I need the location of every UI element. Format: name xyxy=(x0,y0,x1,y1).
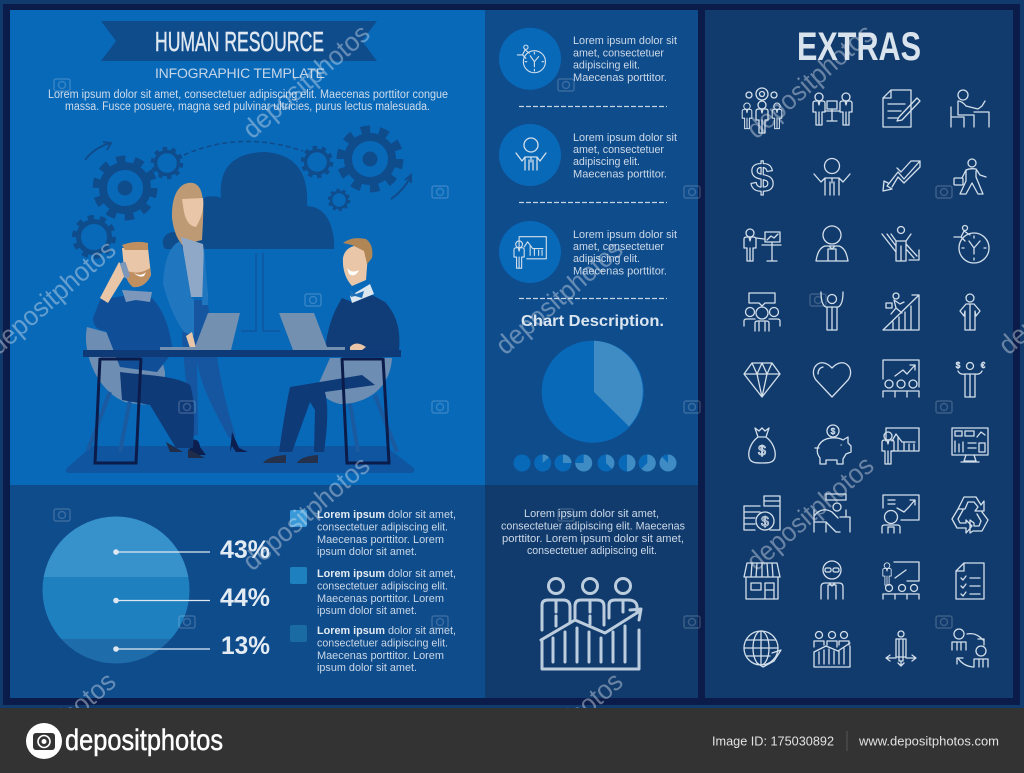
icon: person arms out xyxy=(814,158,850,195)
icon: dollar sign: $ xyxy=(750,154,774,201)
gear small 3 xyxy=(330,190,348,210)
divider 2 xyxy=(519,202,667,204)
paragraph: Lorem ipsum dolor sit amet, xyxy=(524,508,659,520)
footer logo xyxy=(26,723,223,759)
step 3 text xyxy=(573,229,677,278)
dark frame: extras xyxy=(705,4,1020,705)
legend text 2: ipsum dolor sit amet. xyxy=(317,605,417,617)
percent values: 43% xyxy=(220,536,270,564)
paragraph: consectetuer adipiscing elit. Maecenas xyxy=(501,520,685,532)
icon: piggy bank xyxy=(815,425,851,464)
illustration: floor xyxy=(66,446,414,473)
icon: recycle xyxy=(952,497,988,533)
depositphotos watermarks: depositphotos xyxy=(237,450,376,576)
icon: teacher with audience xyxy=(883,562,919,599)
icon: people swap xyxy=(952,629,988,667)
icon: globe xyxy=(744,631,781,667)
step 1 text: Maecenas porttitor. xyxy=(573,72,667,84)
icon: stressed worker xyxy=(814,494,850,532)
laptop right xyxy=(279,313,345,350)
depositphotos watermarks: depositphotos xyxy=(490,234,629,360)
legend text 3: consectetuer adipiscing elit. xyxy=(317,638,448,650)
icon: money bag: $ xyxy=(758,442,766,458)
step 3 text: amet, consectetuer xyxy=(573,241,664,253)
chart heading: Chart Description. xyxy=(521,313,664,330)
legend text 1 xyxy=(317,509,456,558)
title: HUMAN RESOURCE xyxy=(155,26,324,57)
paragraph: consectetuer adipiscing elit. xyxy=(527,545,657,557)
icon: climbing graph xyxy=(883,293,919,330)
icon: presenters with board xyxy=(813,93,852,125)
icon: monitor dashboard xyxy=(952,428,988,462)
icon: person with direction arrows xyxy=(886,631,916,666)
step 1 circle icon xyxy=(499,28,561,90)
step 3 text: Lorem ipsum dolor sit xyxy=(573,229,677,241)
gear small 2 xyxy=(303,148,331,176)
person: man with bow tie xyxy=(263,238,399,463)
icon: checklist xyxy=(956,563,984,599)
pie bands xyxy=(40,514,192,665)
paragraph: porttitor. Lorem ipsum dolor sit amet, xyxy=(502,533,684,545)
step 1 text: Lorem ipsum dolor sit xyxy=(573,35,677,47)
legend text 1: consectetuer adipiscing elit. xyxy=(317,522,448,534)
gear large right xyxy=(341,130,399,188)
step 3 circle icon xyxy=(499,221,561,283)
cloud xyxy=(163,152,334,249)
depositphotos watermarks: depositphotos xyxy=(237,18,376,144)
arrows and dashes xyxy=(85,142,111,160)
legend text 2 xyxy=(317,568,456,617)
title ribbon xyxy=(101,21,377,61)
dark frame: main xyxy=(3,4,705,705)
icon: walking with bag xyxy=(954,159,986,194)
step 2 text: amet, consectetuer xyxy=(573,144,664,156)
person: bearded man with phone xyxy=(86,242,205,458)
step 2 text: adipiscing elit. xyxy=(573,156,640,168)
legend text 2: consectetuer adipiscing elit. xyxy=(317,580,448,592)
small camera watermarks xyxy=(54,79,952,628)
mini pies row xyxy=(514,454,676,472)
legend text 3: Maecenas porttitor. Lorem xyxy=(317,650,444,662)
legend text 3: ipsum dolor sit amet. xyxy=(317,662,417,674)
percent values: 13% xyxy=(221,632,270,660)
icon: team gears xyxy=(742,88,782,133)
depositphotos watermarks: depositphotos xyxy=(741,450,880,576)
icon: bust and board xyxy=(882,495,919,533)
icon: person with falling arrows xyxy=(882,226,919,261)
subtitle: INFOGRAPHIC TEMPLATE xyxy=(155,65,325,81)
legend text 3 xyxy=(317,625,456,674)
panel: middle column xyxy=(485,10,698,485)
icon: team growth chart xyxy=(814,632,850,667)
icon: document with pen xyxy=(883,90,920,127)
gear large left xyxy=(97,160,153,216)
illustration: gears and cloud xyxy=(75,130,411,331)
large icon: team and growth chart xyxy=(541,578,641,669)
person: woman xyxy=(163,183,248,455)
intro text xyxy=(48,89,448,113)
legend text 1: ipsum dolor sit amet. xyxy=(317,546,417,558)
laptop left xyxy=(160,313,240,350)
icon: coin stacks: $ xyxy=(761,513,769,529)
icon: coin stacks xyxy=(744,496,780,530)
icon: diamond xyxy=(744,363,780,397)
percent values: 44% xyxy=(220,584,270,612)
gear lower left xyxy=(75,218,113,256)
icon: money bag xyxy=(749,428,775,463)
pie chart xyxy=(542,341,644,443)
desk xyxy=(83,350,401,463)
legend text 2: Lorem ipsum dolor sit amet, xyxy=(317,568,456,580)
divider 3 xyxy=(519,298,667,300)
step 2 text: Maecenas porttitor. xyxy=(573,168,667,180)
intro text: Lorem ipsum dolor sit amet, consectetuer adipiscing elit. Maecenas porttitor congue xyxy=(48,89,448,101)
footer logo: depositphotos xyxy=(65,724,223,757)
icon: presenter with chart xyxy=(744,229,781,261)
step 1 text: adipiscing elit. xyxy=(573,60,640,72)
icon: presenter with bar chart xyxy=(882,428,919,464)
panel: illustration background xyxy=(10,10,485,485)
icon: running clock xyxy=(954,226,989,263)
icon: falling zigzag arrow xyxy=(883,161,920,191)
icon: standing person xyxy=(960,294,980,330)
icon: person with currencies xyxy=(956,361,986,397)
icon: board with audience xyxy=(883,360,919,397)
step 2 text xyxy=(573,132,677,180)
intro text: massa. Fusce posuere, magna sed pulvinar ultricies, purus lectus malesuada. xyxy=(65,101,430,113)
legend text 3: Lorem ipsum dolor sit amet, xyxy=(317,625,456,637)
step 2 circle icon xyxy=(499,124,561,186)
step 2 text: Lorem ipsum dolor sit xyxy=(573,132,677,144)
divider 1 xyxy=(519,106,667,108)
step 3 text: Maecenas porttitor. xyxy=(573,266,667,278)
step 1 text: amet, consectetuer xyxy=(573,48,664,60)
icon: person with currencies: $ xyxy=(956,361,961,370)
image id: Image ID: 175030892 xyxy=(712,734,834,748)
legend swatches xyxy=(290,510,307,527)
footer bar xyxy=(0,708,1024,773)
icon: arms-up person xyxy=(821,292,843,330)
step 1 text xyxy=(573,35,677,84)
icon: heart xyxy=(813,363,851,397)
gear small 1 xyxy=(153,149,181,177)
paragraph xyxy=(501,508,685,557)
icon: meeting group xyxy=(744,293,780,331)
icon: person with currencies: € xyxy=(981,361,986,370)
legend text 2: Maecenas porttitor. Lorem xyxy=(317,593,444,605)
icon: piggy bank: $ xyxy=(831,427,836,436)
extras heading: EXTRAS xyxy=(797,25,921,69)
site url: www.depositphotos.com xyxy=(858,734,999,748)
panel: extras xyxy=(705,10,1013,698)
step 3 text: adipiscing elit. xyxy=(573,253,640,265)
percent values xyxy=(220,536,270,660)
panel: lower middle xyxy=(485,485,698,698)
network lines xyxy=(241,253,280,331)
icon: bust with glasses xyxy=(821,561,843,599)
panel: percentage pie xyxy=(10,485,485,698)
icon: person at desk xyxy=(951,90,989,127)
depositphotos watermarks: depositphotos xyxy=(741,18,880,144)
leader lines xyxy=(113,549,210,652)
legend text 1: Lorem ipsum dolor sit amet, xyxy=(317,509,456,521)
legend text 1: Maecenas porttitor. Lorem xyxy=(317,534,444,546)
icon: shop xyxy=(744,563,780,599)
icon: bust xyxy=(816,226,848,261)
